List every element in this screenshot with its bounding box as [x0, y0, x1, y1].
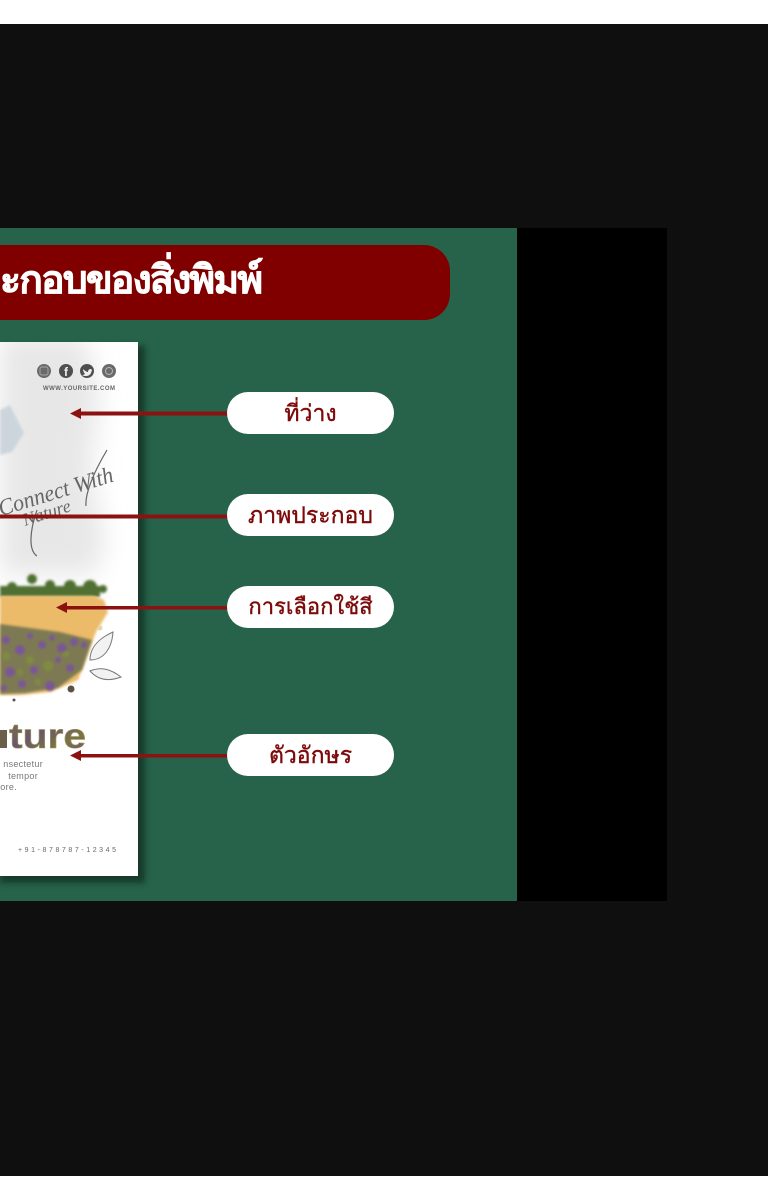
- heading text: ะกอบของสิ่งพิมพ์: [0, 259, 261, 302]
- poster body text: [0, 759, 43, 792]
- poster phone number: +91-878787-12345: [18, 847, 116, 854]
- arrow: colour choice: [56, 602, 230, 613]
- arrow: illustration: [0, 514, 230, 518]
- label: typography: [227, 734, 394, 776]
- sky wash: [0, 335, 105, 575]
- label: colour choice: [227, 586, 394, 628]
- poster shadow: [0, 346, 145, 883]
- website text: WWW.YOURSITE.COM: [43, 386, 115, 392]
- poster body text: nsectetur: [3, 759, 43, 769]
- label: illustration: ภาพประกอบ: [248, 502, 373, 528]
- label: white space: [227, 392, 394, 434]
- label: white space: ที่ว่าง: [284, 400, 337, 426]
- label: typography: ตัวอักษร: [269, 742, 352, 768]
- social icons: [37, 364, 116, 379]
- script text: Connect With Nature: Nature: [19, 496, 73, 530]
- panel: green slide: [0, 228, 517, 901]
- landscape: trees, field, lavender: [0, 574, 108, 702]
- leaf sketches: [90, 632, 121, 680]
- poster body text: ore.: [0, 782, 17, 792]
- label: colour choice: การเลือกใช้สี: [248, 594, 373, 619]
- heading banner: [0, 245, 450, 320]
- black side bar: [517, 228, 667, 901]
- arrow: typography: [70, 750, 230, 761]
- label: illustration: [227, 494, 394, 536]
- poster illustration: [0, 342, 148, 886]
- arrows: [0, 408, 228, 761]
- arrow: white space: [70, 408, 230, 419]
- poster body text: tempor: [8, 771, 38, 781]
- script text: Connect With Nature: [0, 450, 116, 556]
- poster sheet: [0, 342, 138, 876]
- social icons: f: [64, 365, 69, 379]
- poster word: future: ture: [9, 717, 86, 756]
